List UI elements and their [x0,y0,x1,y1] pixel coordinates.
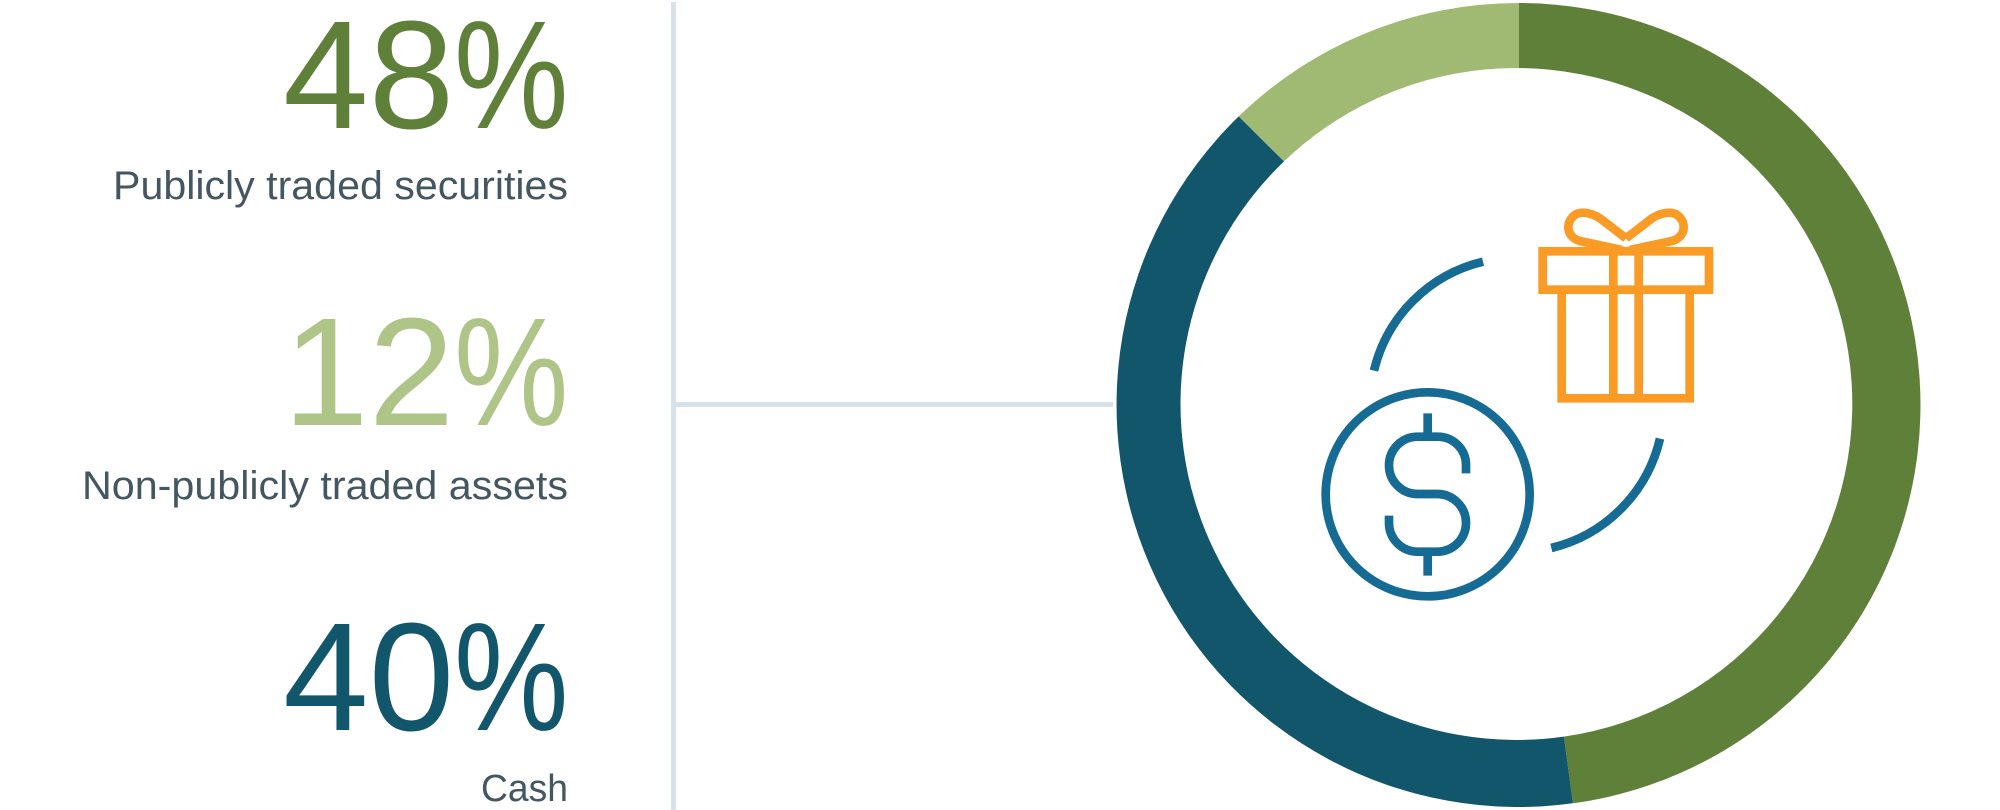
stat: 40% cash [283,591,568,810]
value: 12%: 12 [283,286,454,458]
icon: exchange arc lower [1551,439,1660,548]
icon: exchange arc upper [1374,262,1483,371]
segment: publicly traded securities 48% [1519,3,1920,803]
segment: non-publicly traded assets 12% [1239,3,1519,161]
value: 12%: % [454,286,568,458]
center icon group [1326,213,1709,596]
connector lines [671,2,1113,810]
value: 12% [283,286,568,458]
icon: dollar coin [1326,392,1530,596]
value: 40%: % [454,591,568,763]
label: cash: Cash [481,768,568,810]
segment: cash 40% [1117,116,1573,807]
stat: 12% non-publicly traded assets [82,286,568,508]
stat: 48% publicly traded securities [113,0,568,208]
label: non-publicly traded assets: Non-publicly traded assets [82,464,568,508]
value: 40%: 40 [283,591,454,763]
value: 48% [283,0,568,161]
icon: gift box [1543,213,1709,398]
donut chart [1117,3,1920,807]
value: 40% [283,591,568,763]
label: publicly traded securities: Publicly traded securities [113,164,568,208]
